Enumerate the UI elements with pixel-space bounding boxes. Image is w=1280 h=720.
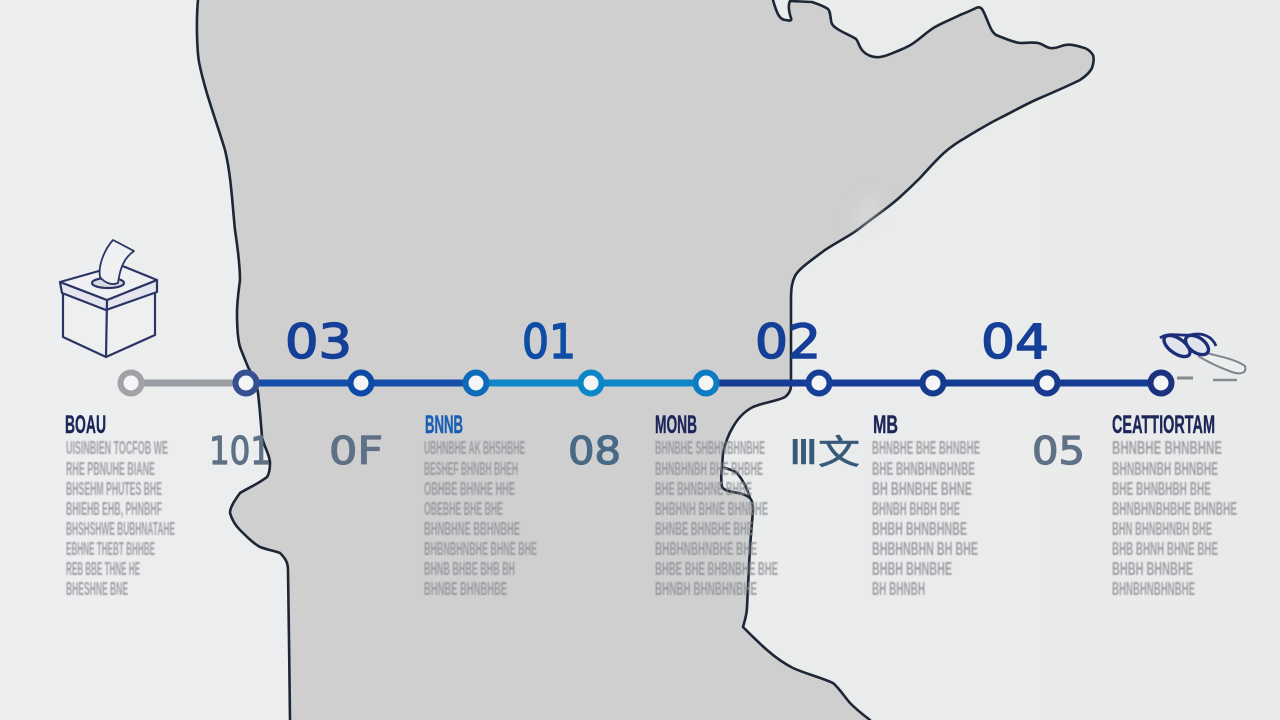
icon: ballot box [60,240,157,357]
column 2 body: BHNB BHBE BHB BH [424,559,515,579]
column 2 body: BHNBE BHNBHBE [424,579,507,599]
text: BHBNBHNBHE BHNE BHE [424,539,537,559]
column 5 body: BHNBHE BHNBHNE [1112,438,1222,458]
number 03: 03 [285,315,352,370]
timeline segment: grey [131,380,246,386]
column 4 body [872,438,980,599]
column 1 body: BHESHNE BNE [66,579,128,599]
number 04 lower: 0F [329,429,383,473]
column 2 body: UBHNBHE AK BHSHBHE [424,438,525,458]
icon: pen and hand [1160,331,1245,380]
column 5 body [1112,438,1237,599]
lower step numbers [209,429,1085,473]
column 3 body: BHNBHNBH BHE BHBHE [655,459,763,479]
column 2 body: OBEBHE BHE BHE [424,499,503,519]
text: BHSHSHWE BUBHNATAHE [66,519,175,539]
column 3 heading: MONB [655,411,697,439]
column 1 body [66,438,175,599]
column 5 [1112,411,1237,599]
column 2 heading: BNNB [425,411,463,439]
column 4 heading: MB [873,411,898,439]
number 08: 08 [568,429,621,473]
timeline nodes [120,372,1172,394]
column 1 body: RHE PBNUHE BIANE [66,459,155,479]
number 05: 05 [1032,429,1085,473]
column 1 body: BHSEHM PHUTES BHE [66,479,162,499]
upper step numbers [285,315,1049,370]
column 4 body: BHBH BHNBHE [872,559,952,579]
column 4 body: BHNBH BHBH BHE [872,499,960,519]
number 02: 02 [755,315,821,370]
column 2 body: OBHBE BHNHE HHE [424,479,515,499]
column 2 [424,411,537,599]
column 1 body: UISINBIEN TOCFOB WE [66,438,168,458]
column 3 body: BHNBE BHNBHE BHE [655,519,753,539]
number 04: 04 [981,315,1049,370]
number 01: 01 [522,315,576,370]
map outline [197,0,1094,720]
column 4 body: BHE BHNBHNBHNBE [872,459,975,479]
column 2 body: BHNBHNE BBHNBHE [424,519,520,539]
timeline segment: light blue [476,380,706,386]
column 3 body [655,438,778,599]
column 5 body: BHNBHNBHNBHE [1112,579,1195,599]
column 1 body: REB BBE THNE HE [66,559,140,579]
column 3 body: BHE BHNBHNE BHBE [655,479,752,499]
column 3 body: BHNBH BHNBHNBHE [655,579,757,599]
column 3 body: BHBHNBHNBHE BHE [655,539,757,559]
number 101: 101 [209,429,271,473]
column 2 body: BESHEF BHNBH BHEH [424,459,518,479]
timeline segment: dark blue [706,380,1161,386]
column 4 body: BHBH BHNBHNBE [872,519,967,539]
column 2 body [424,438,537,599]
number glyphs: Ⅲ文 [789,433,860,473]
column 1 body: EBHNE THEBT BHHBE [66,539,155,559]
column 1 heading: BOAU [65,411,106,439]
column 5 body: BHBH BHNBHE [1112,559,1193,579]
column 3 [655,411,778,599]
column 1 [65,411,175,599]
column 4 body: BHBHNBHN BH BHE [872,539,978,559]
column 1 body: BHIEHB EHB, PHNBHF [66,499,162,519]
column 4 body: BH BHNBHE BHNE [872,479,972,499]
column 3 body: BHBHNH BHNE BHNBHE [655,499,768,519]
column 4 body: BH BHNBH [872,579,925,599]
column 4 body: BHNBHE BHE BHNBHE [872,438,980,458]
column 4 [872,411,980,599]
column 3 body: BHNBHE SHBHNBHNBHE [655,438,765,458]
timeline segment: blue [246,380,476,386]
timeline [120,372,1172,394]
column 3 body: BHBE BHE BHBNBHE BHE [655,559,778,579]
map silhouette [197,0,1094,720]
